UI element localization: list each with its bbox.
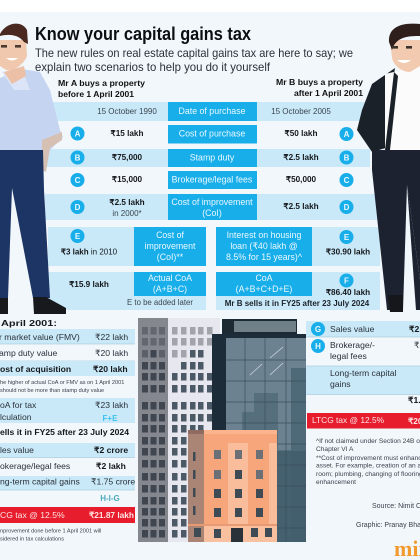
row A: cost of purchase xyxy=(70,125,354,144)
panel: right tax table: Long-term capital xyxy=(330,368,396,378)
heading: Mr A xyxy=(58,78,145,99)
row D: cost of improvement: D xyxy=(344,203,350,212)
row D: cost of improvement: D xyxy=(75,203,81,212)
row: date of purchase: Date of purchase xyxy=(178,106,246,116)
panel: left tax table: he higher of actual CoA or FMV as on 1 April 2001 xyxy=(0,380,124,386)
heading: Mr A: Mr A buys a property xyxy=(58,78,145,88)
row D: cost of improvement: in 2000* xyxy=(112,209,142,218)
panel: left tax table: okerage/legal fees xyxy=(0,461,70,471)
panel: right tax table xyxy=(306,321,420,428)
row B: stamp duty: ₹75,000 xyxy=(112,153,143,162)
heading: Mr B xyxy=(276,77,363,98)
row E: left xyxy=(48,227,206,266)
illustration: Mr A xyxy=(0,24,66,314)
heading: Mr B: Mr B buys a property xyxy=(276,77,363,87)
panel: left tax table: ₹2 crore xyxy=(94,445,128,455)
panel: left tax table: CG tax @ 12.5% xyxy=(0,510,65,520)
row F: left actual CoA: ₹15.9 lakh xyxy=(69,280,109,289)
illustration: buildings xyxy=(138,318,306,542)
row E: left: E xyxy=(75,232,81,241)
row E: right: 8.5% for 15 years)^ xyxy=(226,252,303,262)
grey tower xyxy=(138,318,168,542)
panel: right tax table: legal fees xyxy=(330,351,367,361)
footnotes: room; plumbing, changing of flooring xyxy=(316,471,420,478)
white tower xyxy=(168,318,220,542)
row: date of purchase: 15 October 2005 xyxy=(271,107,331,116)
row B: stamp duty xyxy=(45,149,370,167)
panel: left tax table: ells it in FY25 after 23 July 2024 xyxy=(0,427,129,437)
row F: right CoA: (A+B+C+D+E) xyxy=(236,284,292,294)
row E: right: ₹30.90 lakh xyxy=(326,248,370,256)
row: date of purchase xyxy=(45,102,370,121)
row D: cost of improvement: Cost of improvement xyxy=(171,197,253,207)
heading: Mr B: after 1 April 2001 xyxy=(294,88,363,98)
row D: cost of improvement: (CoI) xyxy=(202,208,222,218)
row C: brokerage xyxy=(70,171,354,189)
panel: left tax table: oA for tax xyxy=(0,400,37,410)
panel: right tax table: LTCG tax @ 12.5% xyxy=(312,415,385,425)
panel: left tax table: lculation xyxy=(0,412,32,422)
row E: right: Interest on housing xyxy=(227,230,302,240)
row E: left: Cost of xyxy=(156,230,184,240)
row F: left actual CoA: E to be added later xyxy=(127,298,193,307)
panel: left tax table: nprovement done before 1 April 2001 will xyxy=(0,528,101,534)
row F: right CoA: ₹86.40 lakh xyxy=(326,288,370,297)
row E: left: ₹3 lakh in 2010 xyxy=(61,248,118,256)
row F: left actual CoA: (A+B+C) xyxy=(153,284,187,294)
panel: left tax table: les value xyxy=(0,445,34,455)
row B: stamp duty: Stamp duty xyxy=(190,152,235,162)
row A: cost of purchase: ₹50 lakh xyxy=(285,129,317,138)
panel: left tax table: ₹22 lakh xyxy=(95,332,128,342)
panel: left tax table xyxy=(0,318,135,542)
panel: right tax table: G xyxy=(315,325,321,334)
footnotes: ^If not claimed under Section 24B or xyxy=(316,438,420,445)
panel: left tax table: should not be more than stamp duty value xyxy=(0,388,104,394)
row B: stamp duty: B xyxy=(75,154,81,162)
glass tower xyxy=(212,319,306,542)
subtitle: The new rules on real estate capital gains tax are here to say; we xyxy=(35,46,353,60)
row E: left: (CoI)** xyxy=(157,252,184,262)
row F: right CoA: Mr B sells it in FY25 after 23 July 2024 xyxy=(225,299,370,308)
panel: left tax table: F+E xyxy=(103,414,118,423)
row B: stamp duty: ₹2.5 lakh xyxy=(283,153,319,162)
row E: right: loan (₹40 lakh @ xyxy=(230,241,298,251)
row C: brokerage: ₹15,000 xyxy=(112,175,143,184)
footnotes: Chapter VI A xyxy=(316,446,354,453)
panel: left tax table: ₹21.87 lakh xyxy=(89,510,134,520)
row F: right CoA: F xyxy=(344,276,349,286)
panel: left tax table: H-I-G xyxy=(100,494,120,503)
row E: left: improvement xyxy=(145,241,196,251)
panel: left tax table: ₹2 lakh xyxy=(96,461,126,471)
heading: Mr A: before 1 April 2001 xyxy=(58,89,134,99)
row B: stamp duty: B xyxy=(344,154,350,162)
row C: brokerage: C xyxy=(344,176,350,185)
row A: cost of purchase: Cost of purchase xyxy=(179,128,245,138)
illustration: Mr B xyxy=(357,24,420,312)
footnotes xyxy=(316,438,420,486)
subtitle xyxy=(35,46,353,74)
row F: right CoA: CoA xyxy=(255,273,273,283)
row A: cost of purchase: A xyxy=(75,130,81,138)
row C: brokerage: ₹50,000 xyxy=(286,175,317,184)
panel: left tax table: sidered in tax calculations xyxy=(0,536,64,542)
row F: left actual CoA xyxy=(48,272,206,310)
row A: cost of purchase: ₹15 lakh xyxy=(111,129,143,138)
row D: cost of improvement: ₹2.5 lakh xyxy=(283,202,319,211)
title: Know your capital gains tax xyxy=(35,24,251,44)
panel: left tax table: ₹1.75 crore xyxy=(91,476,135,486)
panel: left tax table: ₹20 lakh xyxy=(95,348,128,358)
row E: right xyxy=(216,227,380,266)
row D: cost of improvement: ₹2.5 lakh xyxy=(109,198,145,207)
row F: right CoA xyxy=(216,272,380,310)
panel: left tax table: April 2001: xyxy=(1,318,57,328)
panel: right tax table: Brokerage/- xyxy=(330,340,375,350)
panel: left tax table: r market value (FMV) xyxy=(0,332,80,342)
panel: right tax table: Sales value xyxy=(330,324,375,334)
panel: left tax table: ₹20 lakh xyxy=(93,364,128,374)
panel: right tax table: gains xyxy=(330,379,351,389)
row E: right: E xyxy=(344,233,350,242)
panel: left tax table: ost of acquisition xyxy=(0,364,71,374)
row D: cost of improvement xyxy=(45,194,380,220)
panel: left tax table: amp duty value xyxy=(0,348,58,358)
panel: right tax table: H xyxy=(315,342,321,351)
panel: left tax table: ng-term capital gains xyxy=(0,476,80,486)
subtitle: explain two scenarios to help you do it yourself xyxy=(35,60,271,74)
row C: brokerage: C xyxy=(75,176,81,185)
row: date of purchase: 15 October 1990 xyxy=(97,107,157,116)
row F: left actual CoA: Actual CoA xyxy=(148,273,192,283)
footnotes: enhancement xyxy=(316,479,356,486)
row A: cost of purchase: A xyxy=(344,130,350,139)
orange building xyxy=(188,430,277,542)
panel: left tax table: ₹23 lakh xyxy=(95,400,128,410)
row C: brokerage: Brokerage/legal fees xyxy=(172,174,253,184)
